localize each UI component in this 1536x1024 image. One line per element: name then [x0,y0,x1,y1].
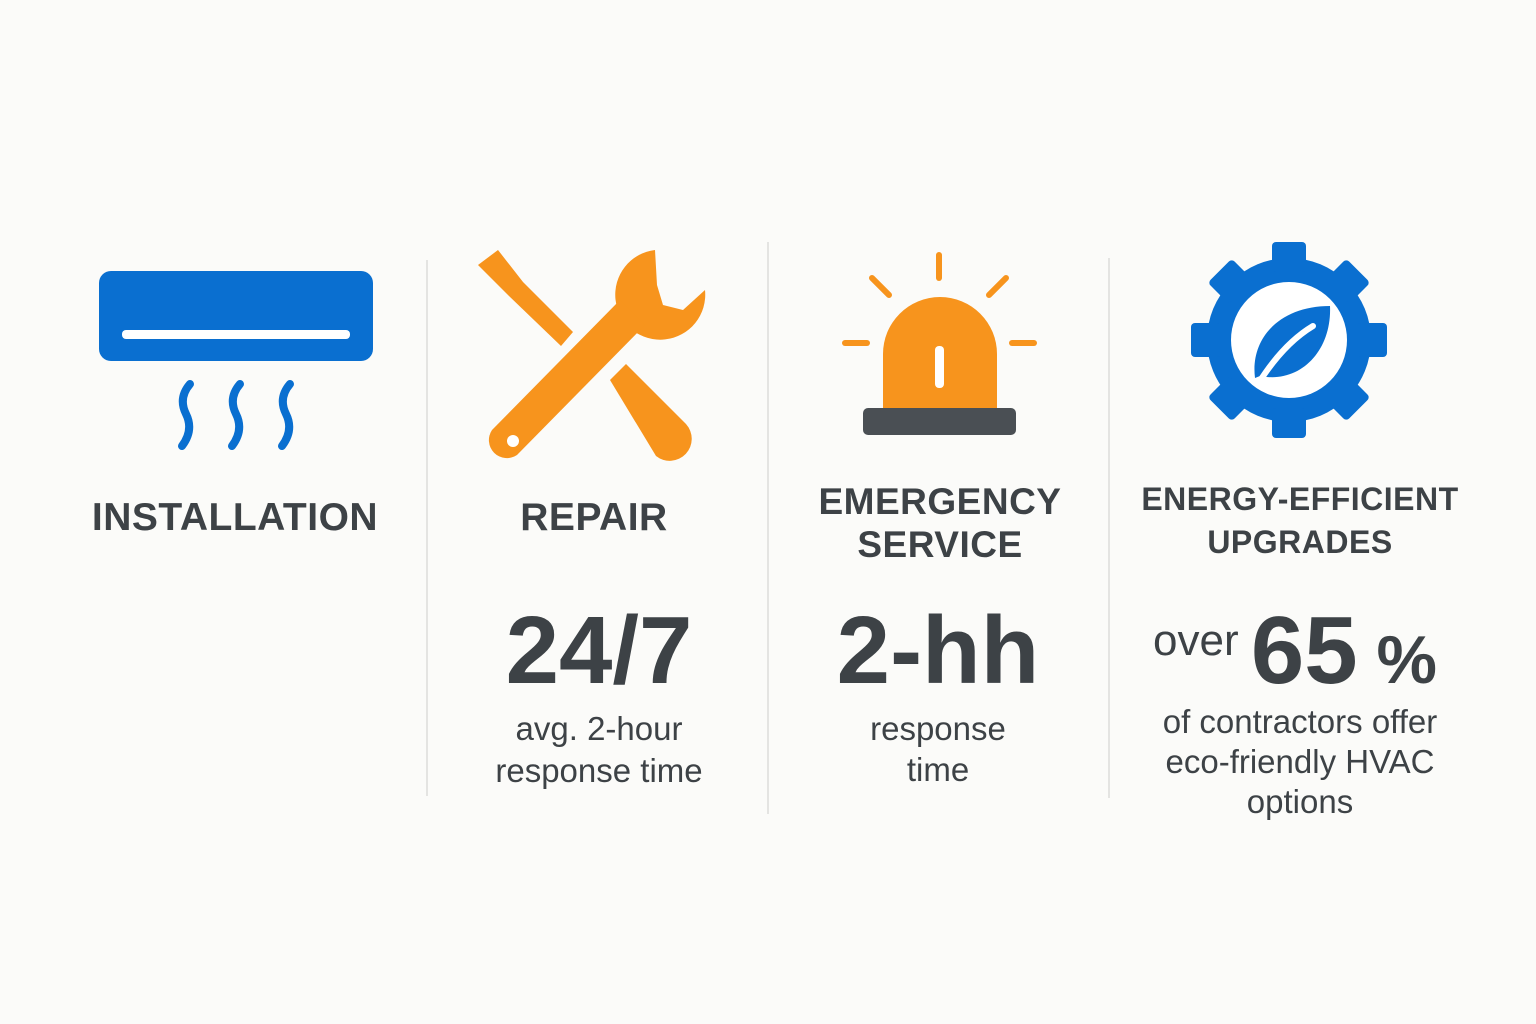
text: repair caption [495,710,703,789]
heading: energy-efficient upgrades: UPGRADES [1207,524,1393,560]
heading: emergency service [818,481,1061,565]
heading: emergency service: EMERGENCY [818,481,1061,522]
heading: repair: REPAIR [520,496,668,539]
icon: gear with leaf [1191,242,1387,438]
text: emergency caption [870,710,1006,788]
text: energy caption: of contractors offer [1163,703,1437,740]
heading: energy-efficient upgrades: ENERGY-EFFICIENT [1141,481,1459,517]
text: energy caption: options [1247,783,1353,820]
text: repair caption: response time [495,752,703,789]
icon: air conditioner [99,271,373,450]
text: repair caption: avg. 2-hour [516,710,682,747]
text: emergency caption: time [907,751,969,788]
text: energy caption: eco-friendly HVAC [1166,743,1434,780]
stat: over 65%: over 65 % [1153,597,1437,704]
heading: emergency service: SERVICE [857,524,1023,565]
icon: emergency siren [842,252,1037,435]
heading: installation: INSTALLATION [92,496,378,539]
text: energy caption [1163,703,1437,820]
stat: 24/7: 24/7 [506,597,692,704]
stat: 2-hh: 2-hh [837,597,1039,704]
heading: energy-efficient upgrades [1141,481,1459,560]
icon: wrench and screwdriver [478,250,706,461]
text: emergency caption: response [870,710,1006,747]
